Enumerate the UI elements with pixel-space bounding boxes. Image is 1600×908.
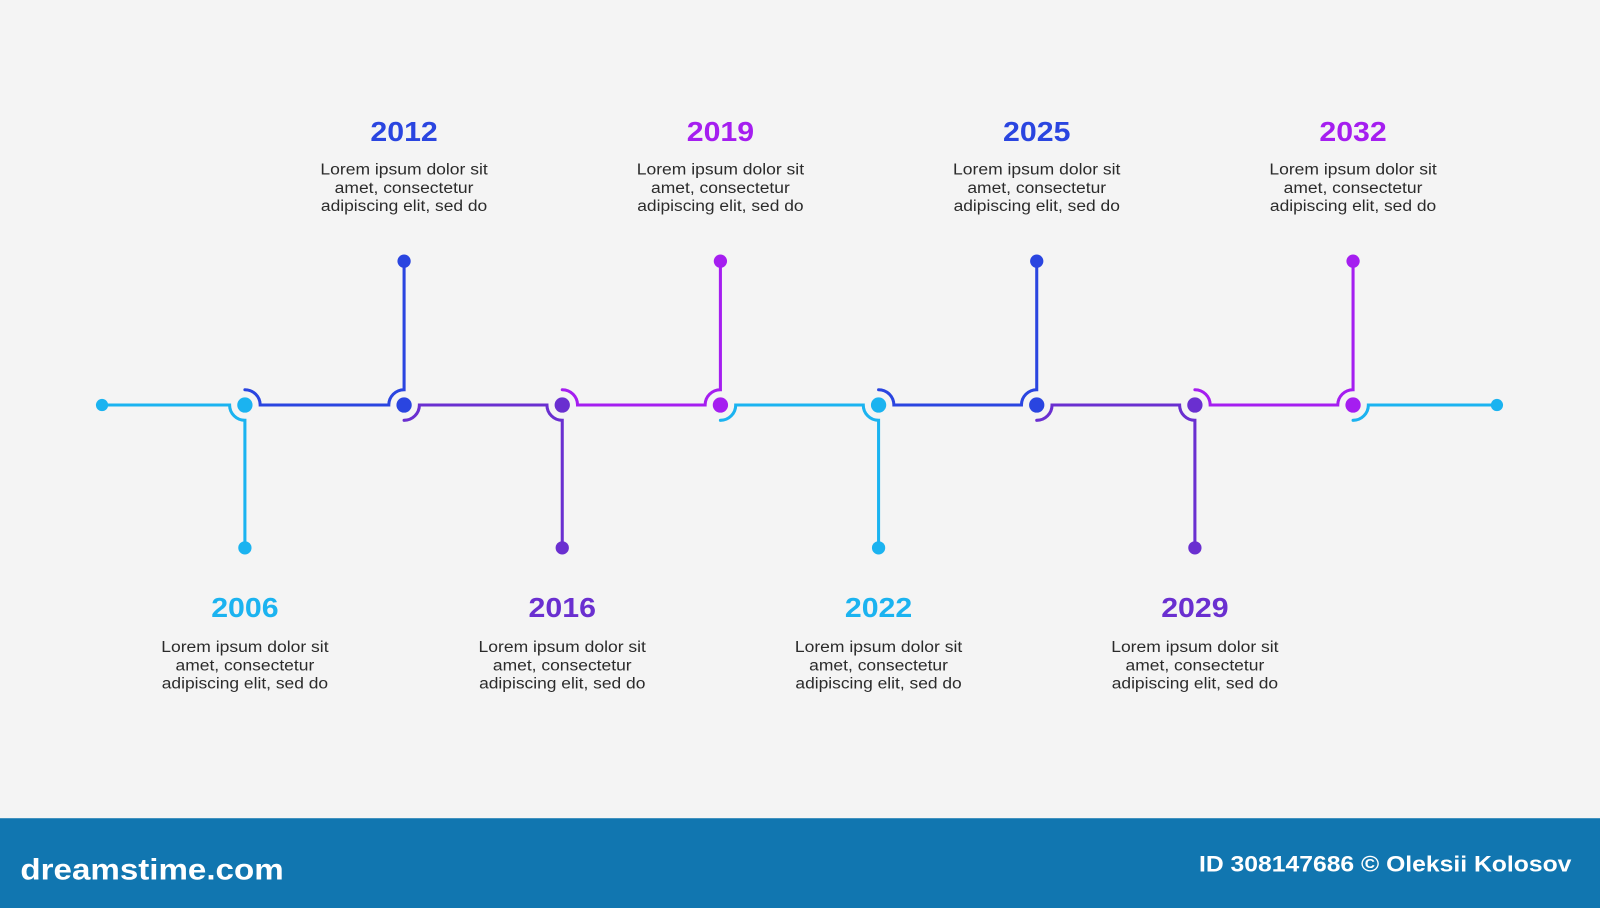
label 2012: adipiscing elit, sed do — [321, 198, 487, 215]
timeline — [96, 255, 1503, 554]
label 2006: Lorem ipsum dolor sit — [161, 639, 329, 656]
label 2032: amet, consectetur — [1284, 180, 1422, 197]
label 2019: amet, consectetur — [651, 180, 790, 197]
label 2022 — [795, 592, 963, 693]
label 2029 — [1111, 592, 1279, 693]
label 2029: 2029 — [1161, 592, 1229, 623]
branch 2019 — [562, 255, 728, 413]
footer logo: dreamstime.com — [20, 853, 284, 886]
label 2012: Lorem ipsum dolor sit — [320, 161, 489, 178]
label 2025: Lorem ipsum dolor sit — [953, 161, 1121, 178]
footer bar — [0, 818, 1600, 908]
label 2012: amet, consectetur — [335, 180, 473, 197]
branch 2016 — [404, 397, 570, 554]
label 2022: 2022 — [845, 592, 912, 623]
label 2025: amet, consectetur — [967, 180, 1106, 197]
label 2025: 2025 — [1003, 116, 1070, 147]
label 2016 — [479, 592, 647, 693]
label 2019: adipiscing elit, sed do — [637, 198, 804, 215]
label 2032: 2032 — [1319, 116, 1387, 147]
label 2022: Lorem ipsum dolor sit — [795, 639, 963, 656]
footer credit: ID 308147686 © Oleksii Kolosov — [1199, 851, 1572, 876]
label 2006 — [161, 592, 329, 693]
branch 2032 — [1195, 255, 1361, 413]
label 2019: 2019 — [687, 116, 754, 147]
label 2006: adipiscing elit, sed do — [162, 676, 328, 693]
label 2029: amet, consectetur — [1126, 657, 1264, 674]
label 2016: Lorem ipsum dolor sit — [479, 639, 647, 656]
label 2029: Lorem ipsum dolor sit — [1111, 639, 1279, 656]
label 2025 — [953, 116, 1121, 215]
label 2012 — [320, 116, 489, 215]
branch 2006 — [96, 397, 253, 554]
label 2029: adipiscing elit, sed do — [1112, 676, 1278, 693]
label 2025: adipiscing elit, sed do — [954, 198, 1120, 215]
branch 2022 — [720, 397, 886, 554]
label 2019: Lorem ipsum dolor sit — [637, 161, 805, 178]
line end — [1353, 399, 1503, 420]
branch 2029 — [1037, 397, 1203, 554]
label 2032 — [1269, 116, 1438, 215]
label 2006: amet, consectetur — [176, 657, 314, 674]
label 2016: amet, consectetur — [493, 657, 632, 674]
label 2032: adipiscing elit, sed do — [1270, 198, 1436, 215]
label 2022: amet, consectetur — [809, 657, 948, 674]
branch 2012 — [245, 255, 412, 413]
label 2006: 2006 — [211, 592, 279, 623]
label 2012: 2012 — [370, 116, 438, 147]
label 2016: adipiscing elit, sed do — [479, 676, 645, 693]
label 2016: 2016 — [529, 592, 596, 623]
label 2022: adipiscing elit, sed do — [795, 676, 962, 693]
branch 2025 — [879, 255, 1044, 413]
label 2019 — [637, 116, 805, 215]
label 2032: Lorem ipsum dolor sit — [1269, 161, 1438, 178]
